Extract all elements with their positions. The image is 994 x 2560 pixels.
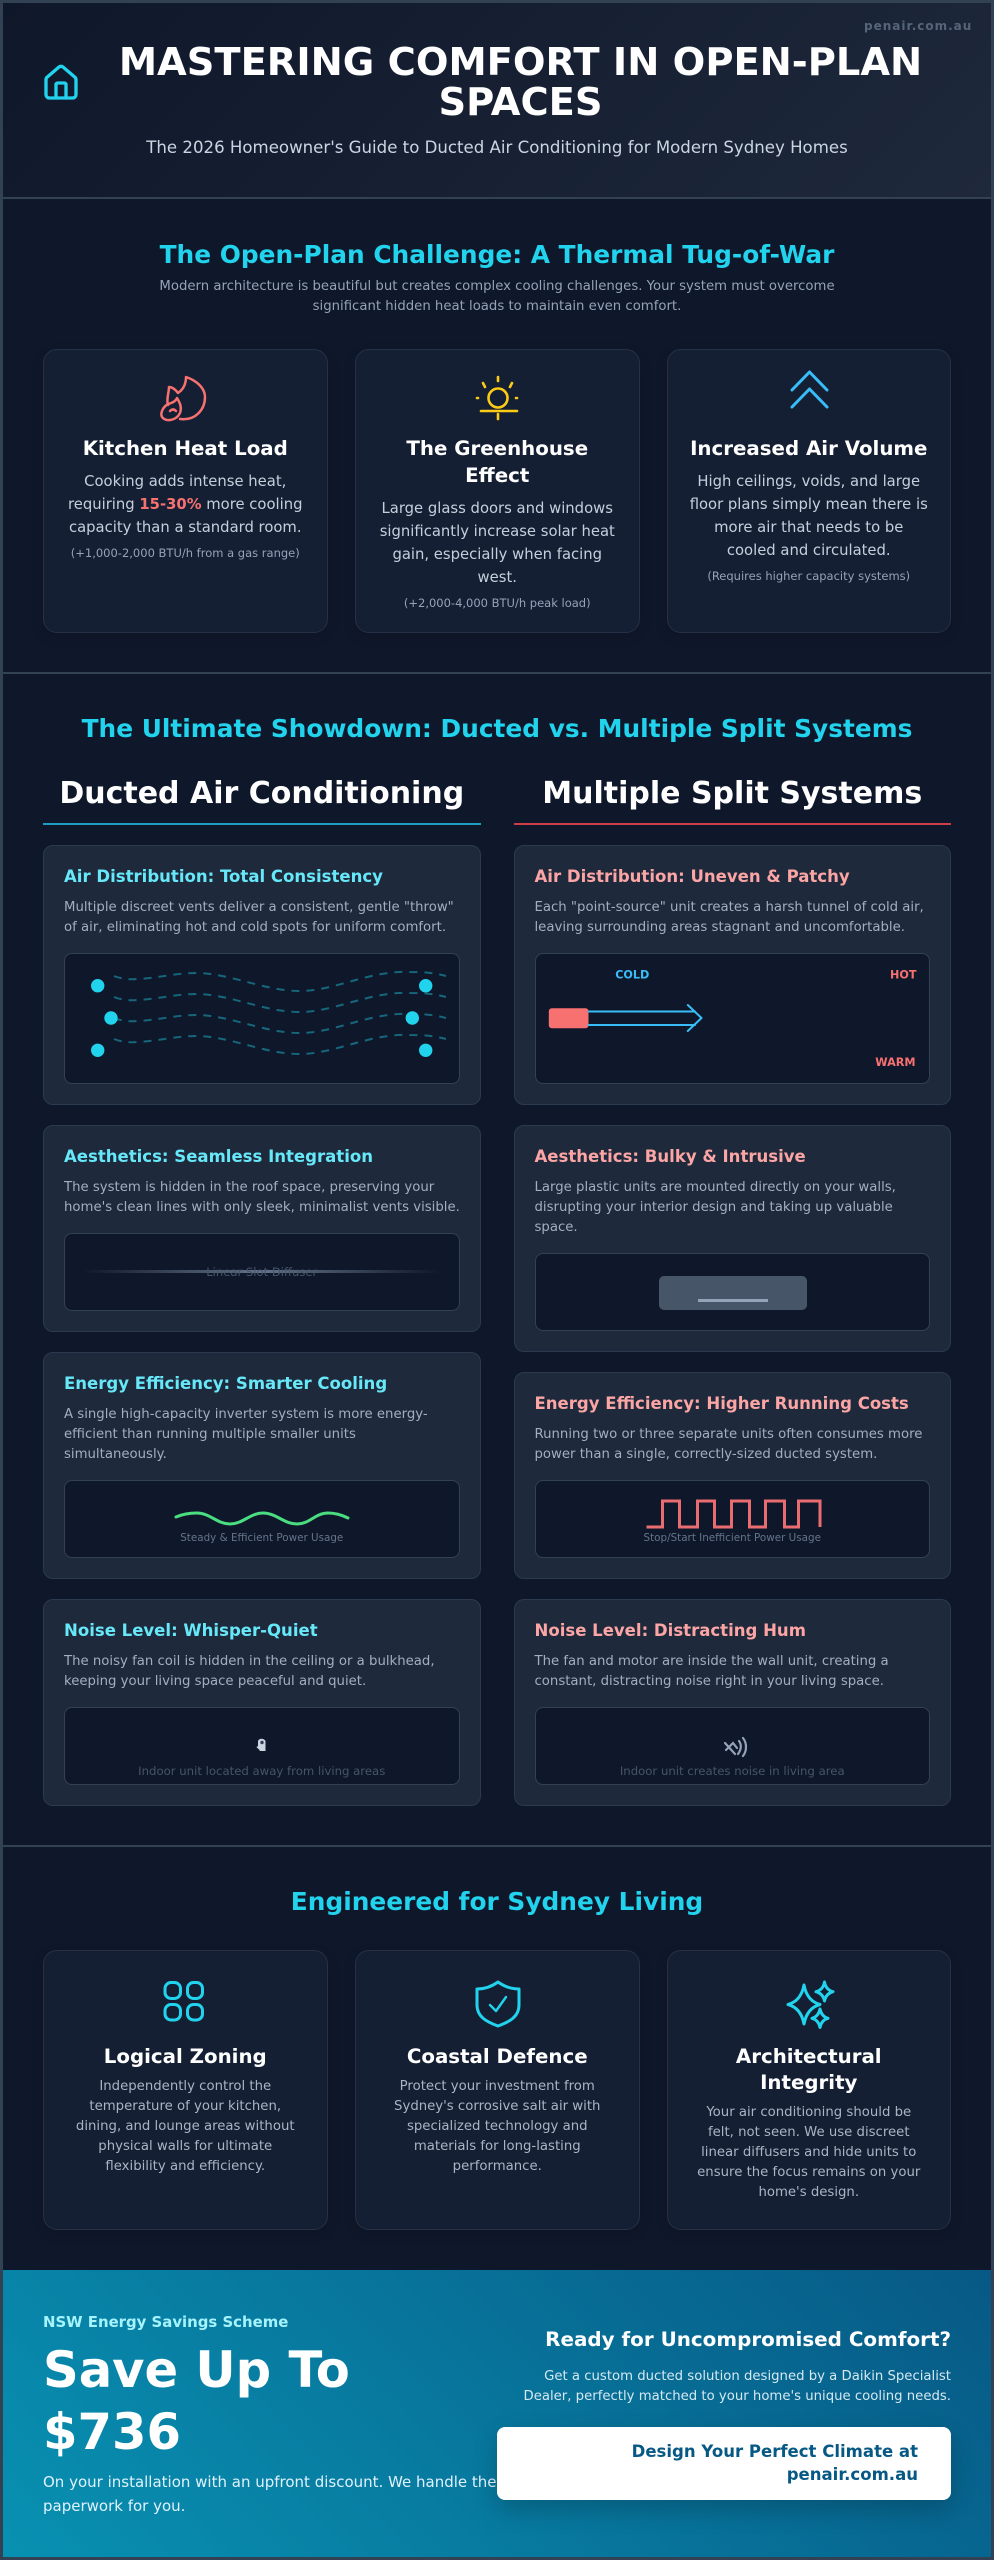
title: MASTERING COMFORT IN OPEN-PLAN bbox=[119, 40, 922, 85]
icon: shield check bbox=[476, 1980, 520, 2028]
card title: Effect bbox=[465, 464, 529, 486]
card title bbox=[736, 2044, 882, 2094]
card text: home's design. bbox=[758, 2185, 859, 2200]
card: architectural integrity bbox=[666, 1950, 951, 2230]
card text: leaving surrounding areas stagnant and uncomfortable. bbox=[534, 920, 905, 935]
card title: Architectural bbox=[736, 2044, 882, 2068]
wall unit bbox=[534, 1253, 930, 1331]
card text: requiring 15-30% more cooling bbox=[68, 496, 303, 513]
intro text bbox=[159, 279, 835, 314]
card: kitchen heat load bbox=[43, 349, 328, 633]
card text: Large glass doors and windows bbox=[382, 500, 613, 517]
heading: The Ultimate Showdown: Ducted vs. Multiple Split Systems bbox=[82, 714, 912, 743]
card title: Noise Level: Distracting Hum bbox=[534, 1621, 806, 1640]
card text: materials for long-lasting bbox=[414, 2139, 581, 2154]
card text bbox=[64, 1654, 435, 1689]
card text: constant, distracting noise right in your living space. bbox=[534, 1674, 884, 1689]
rebate text bbox=[43, 2473, 497, 2515]
card text: The noisy fan coil is hidden in the ceiling or a bulkhead, bbox=[64, 1654, 435, 1669]
card title: Energy Efficiency: Higher Running Costs bbox=[534, 1394, 909, 1413]
card title: Air Distribution: Total Consistency bbox=[64, 867, 383, 886]
card text bbox=[534, 1427, 922, 1462]
card text: High ceilings, voids, and large bbox=[697, 473, 920, 490]
rebate text: paperwork for you. bbox=[43, 2497, 185, 2515]
card title: Air Distribution: Uneven & Patchy bbox=[534, 867, 850, 886]
panel: engineered for sydney living bbox=[43, 1887, 951, 2230]
card text: cooled and circulated. bbox=[727, 542, 891, 559]
card text bbox=[690, 473, 928, 559]
card: ducted noise bbox=[43, 1599, 480, 1806]
cta text: Get a custom ducted solution designed by a Daikin Specialist bbox=[544, 2368, 951, 2384]
panel: call to action footer bbox=[0, 2270, 994, 2558]
card: split aesthetics bbox=[514, 1125, 951, 1352]
cold tunnel diagram: COLD bbox=[615, 968, 649, 982]
cold tunnel diagram bbox=[534, 953, 930, 1084]
card text: linear diffusers and hide units to bbox=[701, 2145, 916, 2160]
title: SPACES bbox=[438, 80, 603, 125]
card text: capacity than a standard room. bbox=[69, 519, 302, 536]
steady power graph: Steady & Efficient Power Usage bbox=[180, 1532, 343, 1544]
panel: the ultimate showdown bbox=[0, 674, 994, 1847]
linear slot diffuser: Linear Slot Diffuser bbox=[206, 1265, 317, 1279]
card title: Energy Efficiency: Smarter Cooling bbox=[64, 1374, 387, 1393]
header bbox=[0, 0, 994, 199]
column heading: split: Multiple Split Systems bbox=[542, 776, 922, 811]
noise diagram bbox=[534, 1707, 930, 1785]
card text: keeping your living space peaceful and quiet. bbox=[64, 1674, 366, 1689]
icon: sun bbox=[476, 376, 518, 420]
card text: simultaneously. bbox=[64, 1447, 167, 1462]
rebate headline bbox=[43, 2341, 350, 2461]
card text: home's clean lines with only sleek, minimalist vents visible. bbox=[64, 1200, 460, 1215]
card text bbox=[380, 500, 615, 586]
icon: sparkles bbox=[786, 1980, 834, 2029]
card text bbox=[64, 1180, 460, 1215]
card note: (+1,000-2,000 BTU/h from a gas range) bbox=[71, 546, 300, 560]
icon: zones grid bbox=[164, 1981, 204, 2022]
card text: Each "point-source" unit creates a harsh tunnel of cold air, bbox=[534, 900, 924, 915]
card title: Aesthetics: Bulky & Intrusive bbox=[534, 1147, 806, 1166]
card text bbox=[64, 900, 454, 935]
card text: of air, eliminating hot and cold spots for uniform comfort. bbox=[64, 920, 446, 935]
cta button: Design Your Perfect Climate at bbox=[632, 2442, 918, 2461]
card text: Your air conditioning should be bbox=[706, 2105, 911, 2120]
card text: A single high-capacity inverter system is more energy- bbox=[64, 1407, 428, 1422]
card text: temperature of your kitchen, bbox=[89, 2099, 281, 2114]
steady power graph bbox=[64, 1480, 460, 1558]
card text: Large plastic units are mounted directly on your walls, bbox=[534, 1180, 896, 1195]
card text: Protect your investment from bbox=[400, 2079, 595, 2094]
card title: The Greenhouse bbox=[406, 437, 588, 460]
subtitle: The 2026 Homeowner's Guide to Ducted Air Conditioning for Modern Sydney Homes bbox=[146, 138, 848, 157]
icon: quiet bbox=[256, 1738, 266, 1751]
icon: flame bbox=[160, 376, 206, 422]
stop-start power graph: Stop/Start Inefficient Power Usage bbox=[644, 1532, 821, 1544]
card text: west. bbox=[478, 569, 517, 586]
card text: more air that needs to be bbox=[714, 519, 903, 536]
cta text bbox=[524, 2368, 951, 2404]
cta text: Dealer, perfectly matched to your home's unique cooling needs. bbox=[524, 2388, 951, 2404]
card title: Coastal Defence bbox=[407, 2044, 588, 2068]
card title: Aesthetics: Seamless Integration bbox=[64, 1147, 373, 1166]
card text: Multiple discreet vents deliver a consistent, gentle "throw" bbox=[64, 900, 454, 915]
card text bbox=[394, 2079, 600, 2174]
card: the greenhouse effect bbox=[355, 349, 640, 633]
card text: Running two or three separate units often consumes more bbox=[534, 1427, 922, 1442]
card text: dining, and lounge areas without bbox=[76, 2119, 295, 2134]
card text: efficient than running multiple smaller units bbox=[64, 1427, 356, 1442]
card text bbox=[697, 2105, 920, 2200]
card text: power than a single, correctly-sized ducted system. bbox=[534, 1447, 877, 1462]
card note: (+2,000-4,000 BTU/h peak load) bbox=[404, 596, 591, 610]
card title: Noise Level: Whisper-Quiet bbox=[64, 1621, 318, 1640]
quiet diagram: Indoor unit located away from living areas bbox=[138, 1764, 385, 1778]
card: ducted air distribution bbox=[43, 845, 480, 1105]
title bbox=[119, 40, 922, 125]
card: split noise bbox=[514, 1599, 951, 1806]
card text bbox=[68, 473, 303, 536]
rebate label: NSW Energy Savings Scheme bbox=[43, 2313, 288, 2331]
icon: noisy speaker bbox=[724, 1736, 748, 1758]
card title bbox=[406, 437, 588, 486]
airflow diagram bbox=[64, 953, 460, 1084]
card text bbox=[534, 1654, 889, 1689]
cta button bbox=[497, 2427, 951, 2500]
column heading: ducted bbox=[43, 774, 480, 825]
card title: Logical Zoning bbox=[104, 2044, 267, 2068]
card text: flexibility and efficiency. bbox=[105, 2159, 265, 2174]
card text: Sydney's corrosive salt air with bbox=[394, 2099, 600, 2114]
card text: Cooking adds intense heat, bbox=[84, 473, 286, 490]
panel: the open-plan challenge bbox=[0, 199, 994, 674]
card text: Independently control the bbox=[99, 2079, 271, 2094]
card text: specialized technology and bbox=[407, 2119, 588, 2134]
card note: (Requires higher capacity systems) bbox=[707, 569, 910, 583]
card: coastal defence bbox=[355, 1950, 640, 2230]
card title: Integrity bbox=[760, 2071, 857, 2094]
heading: The Open-Plan Challenge: A Thermal Tug-of-War bbox=[160, 240, 834, 269]
cold tunnel diagram: WARM bbox=[875, 1056, 915, 1069]
column heading: ducted: Ducted Air Conditioning bbox=[59, 776, 464, 811]
card text bbox=[64, 1407, 428, 1462]
card text: ensure the focus remains on your bbox=[697, 2165, 920, 2180]
card: ducted energy bbox=[43, 1352, 480, 1579]
heading: Engineered for Sydney Living bbox=[291, 1887, 703, 1916]
card text: disrupting your interior design and taking up valuable bbox=[534, 1200, 893, 1215]
site url: penair.com.au bbox=[864, 19, 972, 33]
card: increased air volume bbox=[666, 349, 951, 633]
rebate headline: Save Up To bbox=[43, 2341, 350, 2399]
card text bbox=[76, 2079, 295, 2174]
stop-start power graph bbox=[534, 1480, 930, 1558]
rebate headline: $736 bbox=[43, 2403, 181, 2461]
card title: Kitchen Heat Load bbox=[83, 437, 288, 460]
quiet diagram bbox=[64, 1707, 460, 1785]
column heading: split bbox=[514, 774, 951, 825]
intro text: significant hidden heat loads to maintain even comfort. bbox=[313, 299, 681, 314]
linear slot diffuser bbox=[64, 1233, 460, 1311]
card text: The system is hidden in the roof space, preserving your bbox=[64, 1180, 434, 1195]
icon: double chevron up bbox=[790, 370, 829, 409]
icon: house bbox=[44, 64, 78, 100]
intro text: Modern architecture is beautiful but creates complex cooling challenges. Your system must overcome bbox=[159, 279, 835, 294]
card text: space. bbox=[534, 1220, 578, 1235]
card text: gain, especially when facing bbox=[392, 546, 602, 563]
cta heading: Ready for Uncompromised Comfort? bbox=[545, 2328, 951, 2351]
cta button: penair.com.au bbox=[787, 2465, 918, 2484]
card: ducted aesthetics bbox=[43, 1125, 480, 1332]
card: split air distribution bbox=[514, 845, 951, 1105]
card text bbox=[534, 1180, 896, 1235]
card title: Increased Air Volume bbox=[690, 437, 927, 460]
noise diagram: Indoor unit creates noise in living area bbox=[620, 1764, 845, 1778]
card text: physical walls for ultimate bbox=[98, 2139, 272, 2154]
card: split energy bbox=[514, 1372, 951, 1579]
card text bbox=[534, 900, 924, 935]
card text: The fan and motor are inside the wall unit, creating a bbox=[534, 1654, 889, 1669]
card text: significantly increase solar heat bbox=[380, 523, 615, 540]
card: logical zoning bbox=[43, 1950, 328, 2230]
card text: performance. bbox=[453, 2159, 542, 2174]
card text: felt, not seen. We use discreet bbox=[708, 2125, 910, 2140]
rebate text: On your installation with an upfront discount. We handle the bbox=[43, 2473, 497, 2491]
card text: floor plans simply mean there is bbox=[690, 496, 928, 513]
cold tunnel diagram: HOT bbox=[889, 968, 916, 982]
